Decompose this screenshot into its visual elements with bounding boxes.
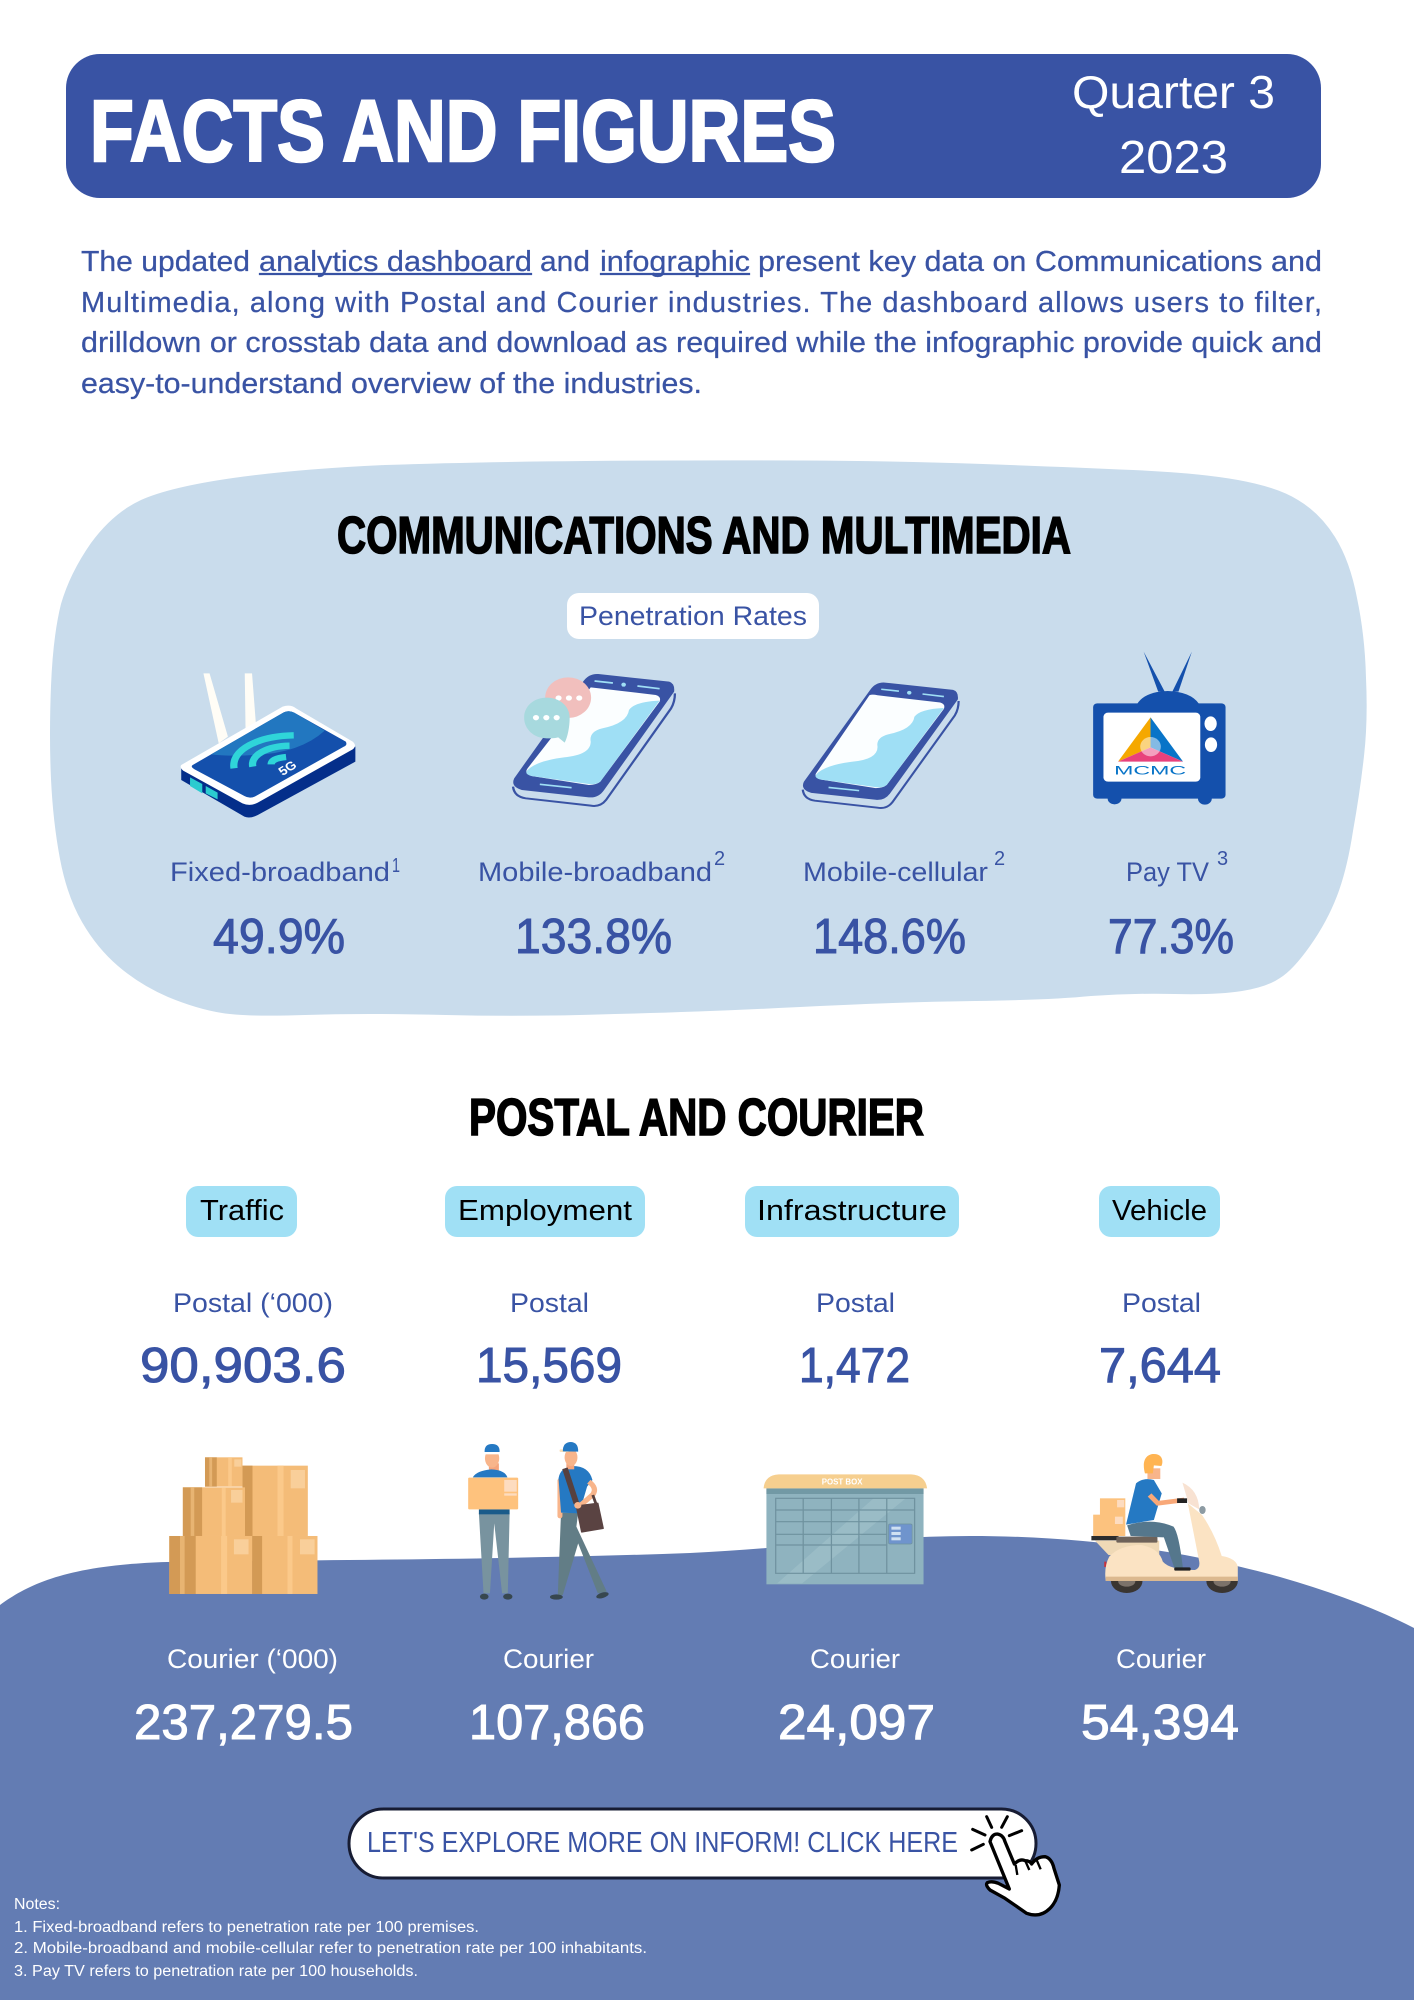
postal figure: traffic: 90,903.6 [140, 1339, 346, 1393]
intro text block: easy-to-understand overview of the industries. [81, 368, 702, 400]
metric: pay TV: 3 [1217, 848, 1228, 870]
postal figure: employment: Postal [510, 1288, 589, 1318]
courier figure: employment: Courier [503, 1644, 594, 1674]
icon: television with MCMC logo [1093, 652, 1226, 805]
notes: 3. Pay TV refers to penetration rate per 100 households. [14, 1963, 418, 1980]
period: quarter: Quarter 3 [1072, 66, 1275, 118]
courier figure: traffic: Courier (‘000) [167, 1644, 338, 1674]
panel: communications and multimedia [50, 460, 1367, 1016]
pill: employment [445, 1186, 645, 1237]
intro text block: analytics dashboard [259, 246, 532, 278]
pill: penetration rates [567, 593, 819, 639]
postal figure: vehicle [1099, 1288, 1221, 1393]
courier figure: employment [469, 1644, 645, 1750]
postal figure: traffic: Postal (‘000) [173, 1288, 333, 1318]
postal figure: infrastructure: 1,472 [799, 1339, 910, 1393]
call to action button [349, 1809, 1059, 1915]
notes [14, 1896, 647, 1980]
icon: 5G router [181, 673, 355, 818]
metric: mobile-broadband: 133.8% [515, 910, 672, 964]
notes: 2. Mobile-broadband and mobile-cellular refer to penetration rate per 100 inhabitants. [14, 1940, 647, 1957]
courier figure: traffic [134, 1644, 353, 1750]
period: year: 2023 [1119, 131, 1228, 183]
icon: post box locker: POST BOX [822, 1477, 862, 1487]
metric: mobile-broadband [478, 848, 725, 964]
icon: two postal workers [468, 1442, 609, 1600]
courier figure: infrastructure: 24,097 [778, 1696, 935, 1750]
chat bubble: teal [524, 698, 570, 743]
metric: pay TV: Pay TV [1126, 857, 1209, 887]
intro text block: The updated [81, 246, 250, 278]
courier figure: infrastructure [778, 1644, 935, 1750]
header banner [66, 54, 1321, 198]
intro text block: infographic [600, 246, 750, 278]
metric: mobile-cellular: Mobile-cellular [803, 857, 988, 887]
section heading: postal and courier: POSTAL AND COURIER [469, 1089, 924, 1147]
icon: smartphone with chat bubbles [513, 674, 675, 806]
courier figure: traffic: 237,279.5 [134, 1696, 353, 1750]
courier figure: employment: 107,866 [469, 1696, 645, 1750]
metric: mobile-cellular: 148.6% [813, 910, 966, 964]
notes: Notes: [14, 1896, 60, 1913]
pill: employment: Employment [458, 1195, 632, 1227]
icon: stacked parcels [169, 1457, 317, 1594]
icon: pointing hand [972, 1817, 1059, 1915]
courier figure: vehicle: Courier [1116, 1644, 1206, 1674]
intro text block: Multimedia, along with Postal and Courier industries. The dashboard allows users to filter, [81, 287, 1322, 319]
worker holding parcel [468, 1444, 518, 1600]
postal figure: vehicle: Postal [1122, 1288, 1201, 1318]
metric: fixed-broadband: Fixed-broadband [170, 857, 390, 887]
postal figure: employment [476, 1288, 622, 1393]
courier figure: vehicle [1081, 1644, 1239, 1750]
pill: traffic: Traffic [200, 1195, 284, 1227]
pill: infrastructure [745, 1186, 959, 1237]
section heading: COMMUNICATIONS AND MULTIMEDIA [337, 507, 1071, 565]
metric: pay TV [1108, 848, 1234, 964]
icon: television with MCMC logo: MCMC [1114, 764, 1187, 777]
pill: infrastructure: Infrastructure [757, 1195, 947, 1227]
notes: 1. Fixed-broadband refers to penetration rate per 100 premises. [14, 1919, 479, 1936]
postal figure: infrastructure: Postal [816, 1288, 895, 1318]
background wave [0, 1536, 1414, 2000]
postal figure: employment: 15,569 [476, 1339, 622, 1393]
metric: mobile-broadband: Mobile-broadband [478, 857, 712, 887]
icon: smartphone [803, 683, 959, 808]
postal figure: infrastructure [799, 1288, 910, 1393]
intro text block: drilldown or crosstab data and download as required while the infographic provide quick and [81, 327, 1322, 359]
intro text block [81, 246, 1322, 400]
pill: traffic [186, 1186, 297, 1237]
icon: 5G router: 5G [275, 758, 300, 778]
metric: pay TV: 77.3% [1108, 910, 1234, 964]
pill: vehicle [1099, 1186, 1220, 1237]
metric: fixed-broadband: 1 [392, 855, 400, 877]
metric: fixed-broadband: 49.9% [213, 910, 345, 964]
worker with satchel [550, 1442, 609, 1600]
icon: courier on scooter [1091, 1454, 1238, 1593]
metric: mobile-cellular [803, 848, 1005, 964]
intro text block: and [540, 246, 590, 278]
metric: fixed-broadband [170, 855, 400, 964]
postal figure: traffic [140, 1288, 346, 1393]
metric: mobile-broadband: 2 [714, 848, 725, 870]
metric: mobile-cellular: 2 [994, 848, 1005, 870]
title: FACTS AND FIGURES [90, 83, 836, 180]
pill: penetration rates: Penetration Rates [579, 601, 807, 631]
call to action button: LET'S EXPLORE MORE ON INFORM! CLICK HERE [367, 1827, 958, 1859]
courier figure: infrastructure: Courier [810, 1644, 900, 1674]
postal figure: vehicle: 7,644 [1099, 1339, 1221, 1393]
icon: post box locker [764, 1474, 927, 1584]
chat bubble: pink [545, 677, 591, 718]
courier figure: vehicle: 54,394 [1081, 1696, 1239, 1750]
intro text block: present key data on Communications and [758, 246, 1322, 278]
pill: vehicle: Vehicle [1112, 1195, 1207, 1227]
